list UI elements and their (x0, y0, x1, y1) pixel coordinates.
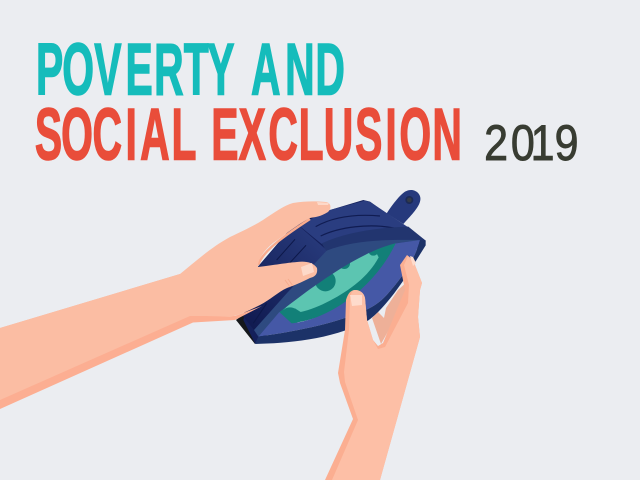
title line 1: POVERTYAND (36, 28, 345, 111)
banknote (283, 248, 379, 312)
wallet inner left panel (243, 223, 327, 330)
right hand (325, 255, 422, 480)
title line 2: SOCIALEXCLUSION (35, 93, 462, 176)
wallet stitching left (253, 239, 306, 323)
wallet inner band (254, 240, 422, 337)
wallet stitching top (316, 215, 394, 236)
knuckle creases (285, 279, 293, 287)
wallet front edge (255, 240, 426, 344)
pinch finger nail (410, 256, 416, 266)
banknote dots (281, 246, 378, 326)
right hand back fingers (372, 280, 409, 344)
strap button (405, 196, 413, 204)
wallet strap (387, 190, 420, 224)
wallet dark strip (322, 227, 426, 252)
wallet inner top panel (298, 201, 408, 244)
wallet front pocket (258, 240, 420, 337)
hand inner shadow (258, 219, 310, 265)
wallet black spine (236, 314, 257, 344)
right hand fill (332, 256, 422, 480)
wallet (236, 190, 426, 344)
banknote shadow (277, 242, 397, 323)
top finger nail (317, 202, 329, 205)
left arm and hand (0, 201, 330, 409)
year: 2019 (484, 115, 579, 171)
right hand shadow (325, 255, 422, 480)
thumb nail (301, 263, 314, 276)
arm and hand (0, 201, 330, 400)
arm shadow (0, 274, 262, 409)
wallet back shell (243, 200, 426, 343)
illustration: hands holding empty wallet (0, 190, 426, 480)
index finger nail (350, 295, 362, 306)
